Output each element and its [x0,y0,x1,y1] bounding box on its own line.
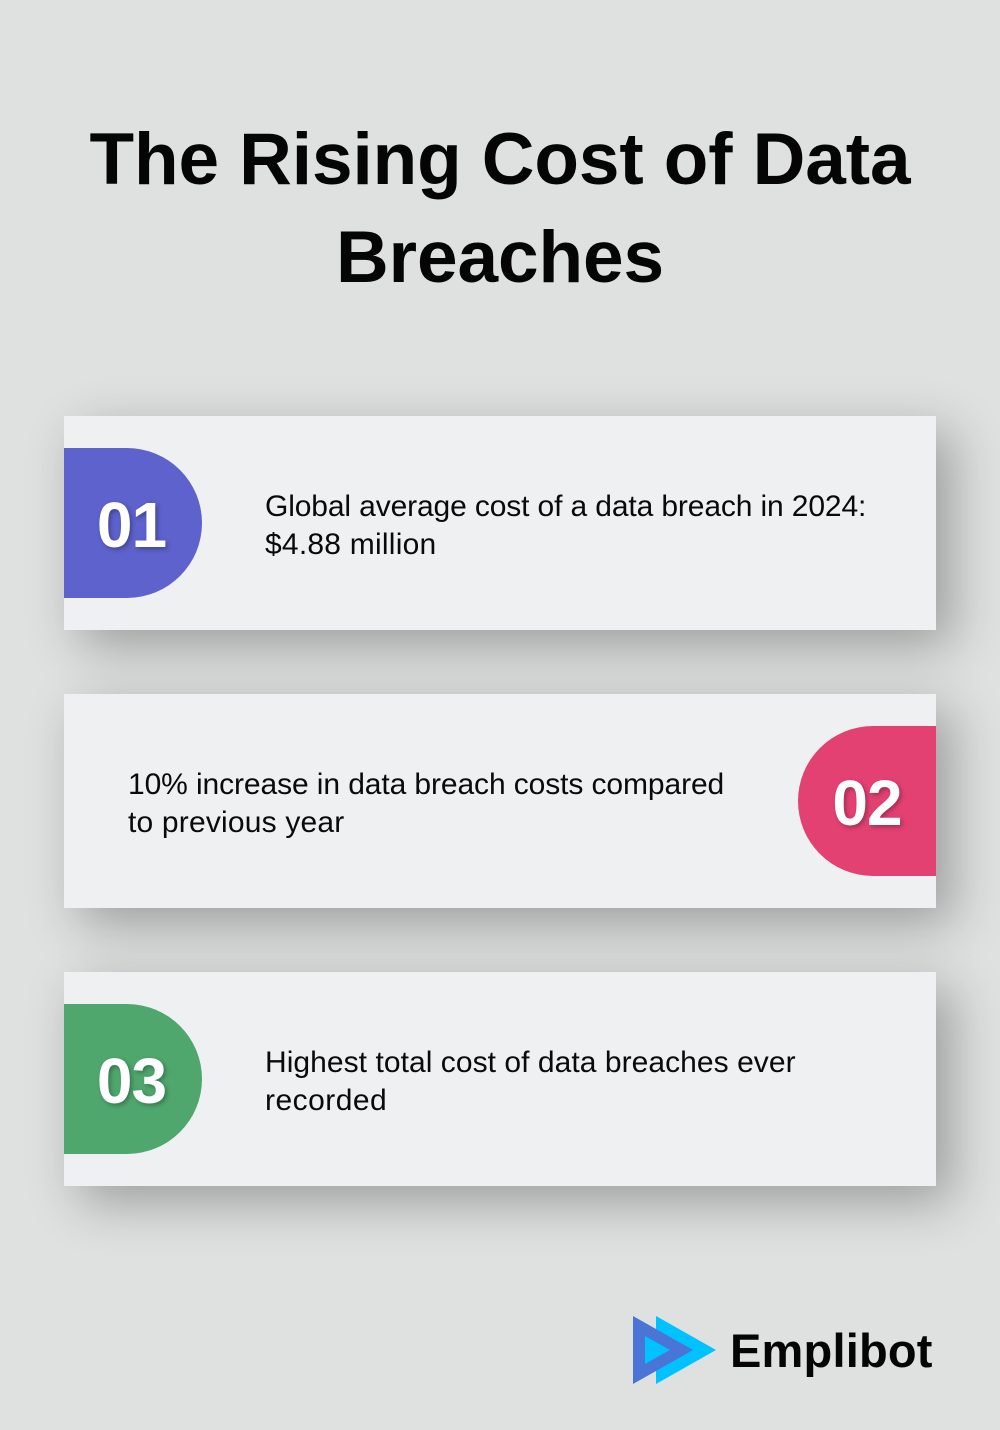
badge: 02 [798,726,936,876]
text: 10% increase: to previous year [128,806,344,839]
logo: Emplibot [633,1316,933,1384]
text: highest total cost: recorded [265,1084,387,1117]
panel: card 02 [64,694,936,908]
icon: play triangles [633,1316,716,1384]
badge: 03: 03 [97,1045,166,1117]
text: 10% increase [128,768,724,839]
panel: card 03 [64,972,936,1186]
wordmark: Emplibot [730,1324,933,1377]
badge: 02: 02 [832,767,902,839]
badge: 01: 01 [97,489,166,561]
text: global average cost [265,490,866,561]
text: 10% increase: 10% increase in data breach costs compared [128,768,724,801]
text: highest total cost [265,1046,796,1117]
text: global average cost: $4.88 million [265,528,436,561]
text: global average cost: Global average cost of a data breach in 2024: [265,490,866,523]
text: highest total cost: Highest total cost of data breaches ever [265,1046,796,1079]
title: The Rising Cost of Data [89,119,911,200]
badge: 01 [64,448,202,598]
badge: 03 [64,1004,202,1154]
title: Breaches [336,217,664,298]
title [89,119,912,298]
panel: card 01 [64,416,936,630]
